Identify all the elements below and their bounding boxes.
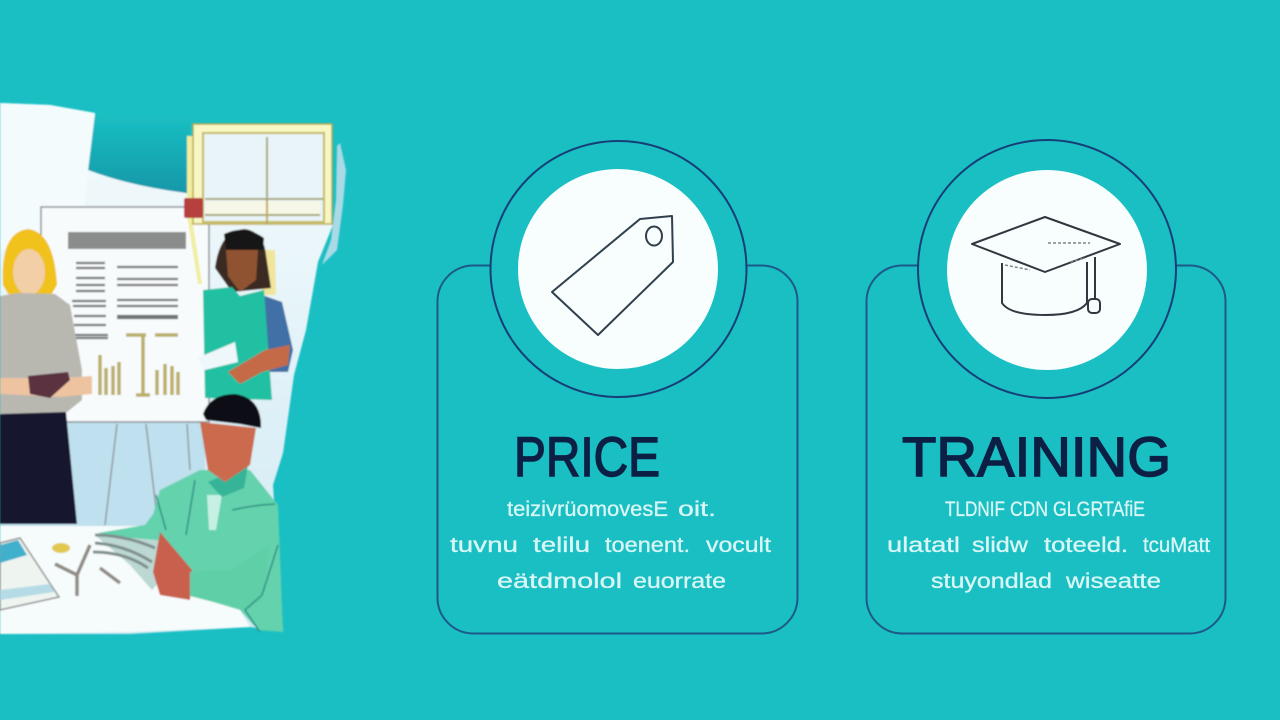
hair highlight bbox=[262, 250, 276, 295]
face bbox=[226, 250, 258, 292]
heading: price: PRICE bbox=[514, 425, 660, 488]
training description: stuyondlad bbox=[931, 570, 1052, 593]
coins bbox=[52, 543, 70, 553]
white icon disc bbox=[518, 169, 718, 369]
training description: slidw bbox=[972, 534, 1029, 557]
board text lines bbox=[72, 263, 178, 338]
cloth bbox=[197, 342, 238, 370]
price description: telilu bbox=[533, 534, 590, 557]
face bbox=[200, 422, 256, 482]
hands bbox=[0, 376, 92, 397]
forearm bbox=[190, 545, 270, 610]
training description: wiseatte bbox=[1065, 570, 1161, 593]
window bbox=[187, 124, 332, 284]
presentation board bbox=[41, 207, 209, 422]
price description: oit. bbox=[678, 498, 716, 521]
skirt bbox=[0, 412, 77, 524]
seam lines bbox=[156, 480, 278, 632]
board header bbox=[68, 232, 186, 249]
training description: toteeld. bbox=[1044, 534, 1128, 557]
price description: eätdmolol bbox=[497, 570, 622, 593]
top bbox=[203, 287, 272, 400]
jacket bbox=[260, 295, 293, 372]
icon: graduation cap bbox=[972, 217, 1120, 315]
table items bbox=[0, 535, 155, 610]
price description: euorrate bbox=[633, 570, 726, 593]
arm bbox=[228, 345, 290, 384]
icon ring bbox=[490, 141, 746, 397]
hair bbox=[203, 394, 261, 428]
price description: teizivrüomovesE bbox=[507, 498, 668, 521]
book bbox=[28, 372, 70, 398]
green upper arm bbox=[98, 498, 172, 548]
card outline bbox=[866, 266, 1226, 634]
wall below board bbox=[0, 420, 205, 526]
illustration: team reviewing a presentation board bbox=[0, 103, 346, 634]
price description: vocult bbox=[706, 534, 771, 557]
icon ring bbox=[918, 140, 1176, 398]
training description: ulatatl bbox=[887, 534, 960, 557]
panel: price bbox=[438, 141, 798, 634]
card outline bbox=[438, 266, 798, 634]
hair bbox=[3, 229, 57, 297]
person 3: seated man in green bbox=[0, 394, 283, 634]
fan of papers bbox=[93, 535, 155, 568]
collar highlight bbox=[207, 495, 222, 530]
price description: tuvnu bbox=[450, 534, 518, 557]
training description: GLGRTAfiE bbox=[1053, 498, 1145, 521]
person 2: woman with teal top bbox=[197, 229, 293, 400]
table bbox=[0, 526, 250, 634]
training description bbox=[887, 498, 1210, 593]
price description: toenent. bbox=[605, 534, 690, 557]
green shirt bbox=[150, 470, 283, 632]
price description bbox=[450, 498, 771, 593]
small stand bbox=[55, 545, 120, 596]
curtain bbox=[0, 103, 95, 250]
room wall bbox=[0, 103, 333, 634]
icon: price tag bbox=[552, 216, 673, 335]
panel: training bbox=[866, 140, 1226, 634]
window side drape bbox=[322, 143, 346, 265]
hair bbox=[215, 229, 271, 292]
training description: tcuMatt bbox=[1143, 534, 1210, 557]
heading: training: TRAINING bbox=[902, 425, 1171, 488]
dark teal backdrop notch bbox=[88, 115, 190, 195]
training description: TLDNIF bbox=[945, 498, 1005, 521]
brochure bbox=[0, 538, 59, 610]
white icon disc bbox=[947, 170, 1147, 370]
sleeve and hand bbox=[95, 535, 170, 590]
person 1: blonde woman bbox=[0, 229, 92, 524]
training description: CDN bbox=[1010, 498, 1048, 521]
face bbox=[13, 249, 45, 295]
board bar chart bbox=[100, 335, 178, 395]
board stand legs bbox=[105, 424, 190, 525]
torso bbox=[0, 293, 82, 414]
red clip bbox=[184, 198, 203, 218]
